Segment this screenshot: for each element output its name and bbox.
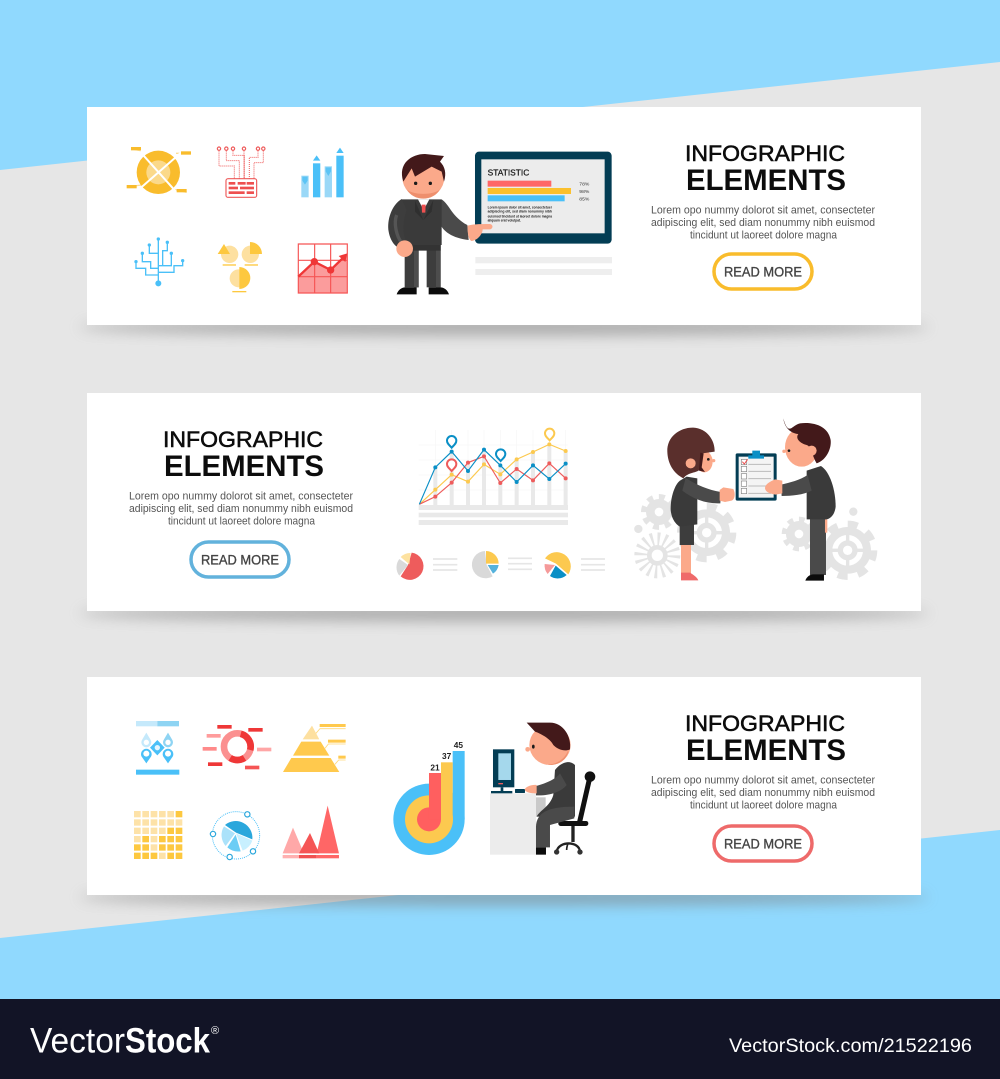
title block [651,141,875,289]
bottom icon grid [134,721,346,860]
nested radial bar chart: 21 [430,762,440,772]
statistic monitor: 78% [579,181,590,187]
map pins [447,429,554,471]
two colleagues with clipboard [636,418,874,581]
body text: adipiscing elit, sed diam nonummy nibh euismod [651,787,875,799]
heading: INFOGRAPHIC [685,711,845,736]
icon: blue pins [136,721,179,775]
icon: red line chart grid [298,244,347,293]
heading: ELEMENTS [686,164,846,197]
button: READ MORE [724,836,802,852]
panel shadow [79,889,929,905]
seated businessman [525,723,575,855]
pie 3 [545,552,605,578]
nested radial bar chart [393,740,465,855]
body text: adipiscing elit, sed diam nonummy nibh euismod [129,503,353,515]
office chair [554,771,595,855]
body text: tincidunt ut laoreet dolore magna [690,800,838,812]
button: READ MORE [724,264,802,280]
line chart and pies [396,429,605,580]
footer logo: Vector [30,1022,125,1060]
button [714,826,812,861]
panel: middle banner [79,393,929,621]
icon: yellow donut [127,147,191,194]
man [765,418,836,581]
pie 2 [472,551,532,578]
heading: ELEMENTS [686,734,846,767]
icon: yellow grid [134,811,182,859]
panel: bottom banner [79,677,929,905]
statistic monitor: adipiscing elit, sed diam nonummy nibh [488,210,552,214]
heading: INFOGRAPHIC [685,141,845,166]
button: READ MORE [201,552,279,568]
icon: bars with arrows [301,148,344,197]
statistic monitor: aliquam erat volutpat. [488,218,521,222]
icon: yellow pyramid [283,724,346,772]
footer bar [0,999,1000,1079]
title block [129,427,353,577]
desk illustration [393,723,595,855]
footer logo: Stock [125,1022,210,1060]
footer logo [30,1022,219,1060]
body text [129,490,353,528]
pie 1 [396,553,457,580]
footer logo: ® [211,1025,219,1037]
body text: Lorem opo nummy dolorot sit amet, consecteter [651,204,875,216]
nested radial bar chart: 37 [442,751,452,761]
panel background [87,677,921,895]
businessman pointing [388,154,492,294]
heading [685,141,846,197]
woman [667,428,735,580]
gears [636,497,874,576]
body text: Lorem opo nummy dolorot sit amet, consecteter [651,774,875,786]
statistic monitor: 98% [579,189,590,195]
statistic monitor: euismod tincidunt ut laoreet dolore magna [488,214,552,218]
panel shadow [79,319,929,335]
clipboard checklist [736,451,777,501]
icon: red mountains [283,806,339,858]
body text: Lorem opo nummy dolorot sit amet, consecteter [129,490,353,502]
title block [651,711,875,861]
statistic monitor: Lorem ipsum dolor sit amet, consectetuer [488,205,553,209]
statistic monitor: 85% [579,197,590,203]
icon: three yellow pies [218,242,262,292]
nested radial bar chart: 45 [454,740,463,750]
heading [685,711,846,767]
statistic monitor: STATISTIC [488,168,529,178]
heading [163,427,324,483]
heading: ELEMENTS [164,450,324,483]
line chart [419,430,568,525]
top icon grid [127,147,347,293]
panel background [87,107,921,325]
body text: adipiscing elit, sed diam nonummy nibh euismod [651,217,875,229]
body text [651,774,875,812]
icon: circuit keyboard [217,147,265,197]
button [714,254,812,289]
statistic monitor [475,152,612,244]
panel: top banner [79,107,929,335]
button [191,542,289,577]
footer url: VectorStock.com/21522196 [729,1035,972,1057]
body text [651,204,875,242]
icon: red donut [203,725,271,769]
icon: blue tree [134,237,184,286]
desk and computer [490,749,546,855]
heading: INFOGRAPHIC [163,427,323,452]
panel background [87,393,921,611]
placeholder lines [475,257,612,275]
icon: blue pie orbit [210,812,260,860]
panel shadow [79,605,929,621]
presenter illustration [388,152,612,294]
body text: tincidunt ut laoreet dolore magna [168,516,316,528]
body text: tincidunt ut laoreet dolore magna [690,230,838,242]
